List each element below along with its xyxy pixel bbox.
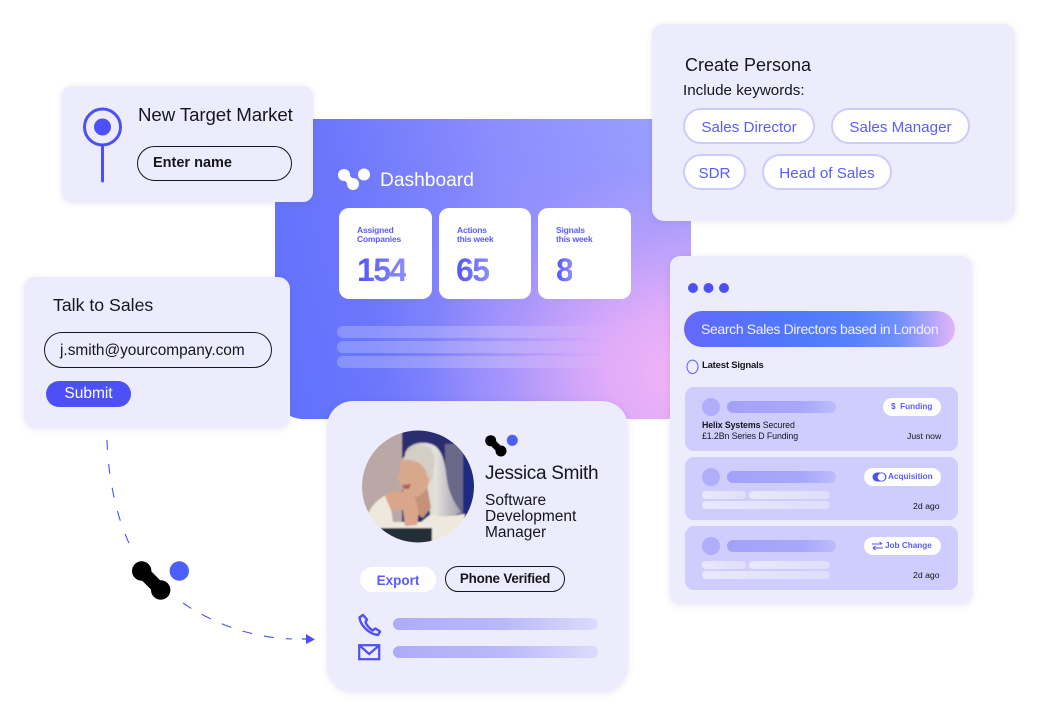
input text: j.smith@yourcompany.com (60, 342, 245, 359)
input: email (44, 332, 272, 368)
icon: map pin (83, 108, 122, 182)
stat value: 8 (556, 252, 572, 288)
job title: Development (485, 508, 576, 525)
stat value: 65 (456, 252, 489, 288)
panel: dashboard (275, 119, 691, 419)
panel: new target market (62, 86, 313, 202)
name placeholder (727, 540, 836, 552)
panel: profile card (327, 401, 628, 692)
stat label: Companies (357, 234, 401, 244)
chip: sales manager: Sales Manager (849, 119, 952, 136)
stat label (357, 225, 401, 244)
chip: sales director (683, 108, 815, 144)
tag: job change: Job Change (885, 541, 932, 550)
stat card: assigned companies (339, 208, 432, 299)
signal row: acquisition (685, 457, 958, 520)
tag: acquisition (864, 468, 941, 486)
icon: phone (358, 614, 382, 636)
contact bar: phone (393, 618, 598, 630)
name: jessica smith: Jessica Smith (485, 463, 598, 484)
stat label: Assigned (357, 225, 394, 235)
search bar (684, 311, 955, 347)
avatar placeholder (702, 398, 720, 416)
tag: job change (864, 537, 941, 555)
tag: funding (883, 398, 941, 416)
chip: head of sales: Head of Sales (779, 165, 875, 182)
name placeholder (727, 471, 836, 483)
tag: acquisition: Acquisition (888, 472, 933, 481)
heading: create persona: Create Persona (685, 55, 811, 75)
timestamp: 2d ago (913, 570, 940, 580)
panel: talk to sales (24, 277, 290, 428)
chip: sales manager (831, 108, 970, 144)
icon: center logo (132, 561, 189, 600)
badge: phone verified (445, 566, 565, 592)
photo: woman (362, 430, 474, 542)
stat label: Signals (556, 225, 585, 235)
arrow: dashed path upper (106, 440, 130, 544)
button: export: Export (377, 573, 419, 588)
stat card: signals this week (538, 208, 631, 299)
placeholder lines (337, 326, 566, 368)
text: helix systems: £1.2Bn Series D Funding (702, 431, 798, 441)
stat label: Actions (457, 225, 487, 235)
icon: signal ring (686, 360, 698, 374)
avatar placeholder (702, 537, 720, 555)
stat label: this week (457, 234, 493, 244)
text: helix systems (702, 420, 798, 441)
heading: dashboard: Dashboard (380, 170, 474, 191)
signal row: job change (685, 526, 958, 590)
chip: sdr: SDR (698, 165, 731, 182)
icon: toggle (872, 472, 886, 482)
search bar: Search Sales Directors based in London (701, 321, 938, 337)
input text: Enter name (153, 155, 232, 171)
text: include keywords: Include keywords: (683, 82, 805, 99)
timestamp: 2d ago (913, 501, 940, 511)
job title: Software (485, 492, 546, 509)
icon: window dots (688, 283, 729, 293)
job title (485, 492, 576, 541)
heading: latest signals: Latest Signals (702, 360, 764, 371)
name placeholder (727, 401, 836, 413)
heading: talk to sales: Talk to Sales (53, 295, 153, 315)
icon: dashboard logo (338, 168, 370, 190)
chip: head of sales (762, 154, 892, 190)
badge: phone verified: Phone Verified (460, 571, 550, 586)
button: submit (46, 381, 131, 407)
icon: swap arrows (872, 542, 883, 550)
text: helix systems: Helix Systems Secured (702, 420, 795, 430)
panel: signals (670, 256, 972, 604)
stat card: actions this week (439, 208, 531, 299)
avatar placeholder (702, 468, 720, 486)
stat label: this week (556, 234, 592, 244)
signal row: funding (685, 387, 958, 451)
placeholder text lines (702, 561, 830, 579)
arrow: dashed path lower (182, 602, 315, 644)
input: enter name (137, 146, 292, 181)
placeholder text lines (702, 491, 830, 509)
heading: new target market: New Target Market (138, 104, 293, 125)
panel: create persona (652, 24, 1015, 221)
chip: sdr (683, 154, 746, 190)
chip: sales director: Sales Director (701, 119, 797, 136)
contact bar: email (393, 646, 598, 658)
timestamp: Just now (907, 431, 941, 441)
stat label (457, 225, 494, 244)
tag: funding: $ Funding (891, 402, 932, 411)
job title: Manager (485, 524, 546, 541)
stat value: 154 (357, 252, 406, 288)
stat label (556, 225, 593, 244)
button: export (360, 567, 436, 592)
icon: mail (358, 644, 380, 660)
icon: profile logo (485, 434, 518, 456)
button: submit: Submit (64, 385, 113, 402)
